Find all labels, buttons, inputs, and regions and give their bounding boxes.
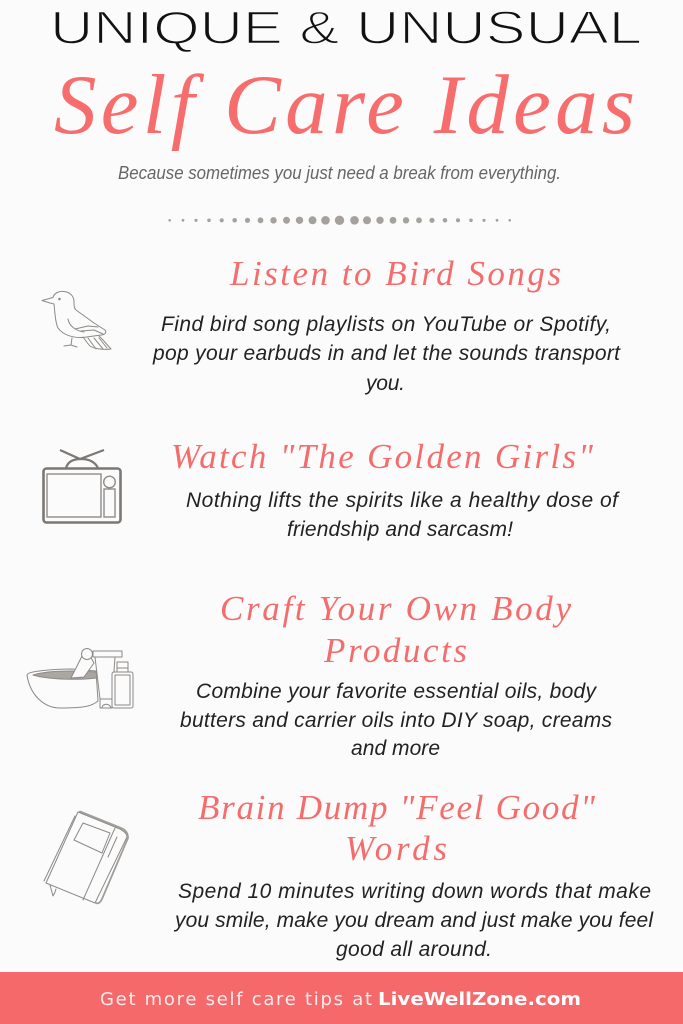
footer banner: Get more self care tips at [100,989,372,1010]
title: Unique & Unusual: UNIQUE & UNUSUAL [50,2,642,54]
footer banner [0,972,683,1024]
text: brain dump description [173,880,654,961]
text: brain dump description: good all around. [336,938,492,961]
heading: Brain Dump Feel Good Words [198,788,595,868]
text: body products description: butters and carrier oils into DIY soap, creams [180,709,612,732]
text: bird songs description: Find bird song playlists on YouTube or Spotify, [161,313,611,336]
text: brain dump description: Spend 10 minutes writing down words that make [178,880,651,903]
tagline: Because sometimes you just need a break from everything. [118,162,561,183]
text: bird songs description [152,313,621,395]
heading: Craft Your Own Body Products: Products [323,631,467,670]
dotted divider [168,216,511,225]
text: golden girls description [186,489,620,541]
heading: Listen to Bird Songs: Listen to Bird Songs [229,254,561,293]
icon: television [44,450,120,522]
footer banner: LiveWellZone.com [378,989,581,1010]
title: Self Care Ideas: Self Care Ideas [54,58,635,152]
text: golden girls description: friendship and sarcasm! [287,518,513,541]
text: body products description: Combine your favorite essential oils, body [196,680,598,703]
heading: Craft Your Own Body Products: Craft Your Own Body [220,589,571,628]
icon: mortar, tube and bottle [27,648,133,708]
text: bird songs description: you. [364,372,405,395]
icon: notebook [44,812,128,903]
text: brain dump description: you smile, make you dream and just make you feel [173,909,654,932]
heading: Watch The Golden Girls: Watch "The Golden Girls" [171,437,593,476]
text: body products description [180,680,612,760]
heading: Brain Dump Feel Good Words: Words [345,829,447,868]
heading: Craft Your Own Body Products [220,589,571,670]
text: body products description: and more [351,737,440,760]
heading: Brain Dump Feel Good Words: Brain Dump "Feel Good" [198,788,595,827]
icon: bird [42,291,111,349]
text: golden girls description: Nothing lifts the spirits like a healthy dose of [186,489,620,512]
text: bird songs description: pop your earbuds in and let the sounds transport [152,342,621,365]
